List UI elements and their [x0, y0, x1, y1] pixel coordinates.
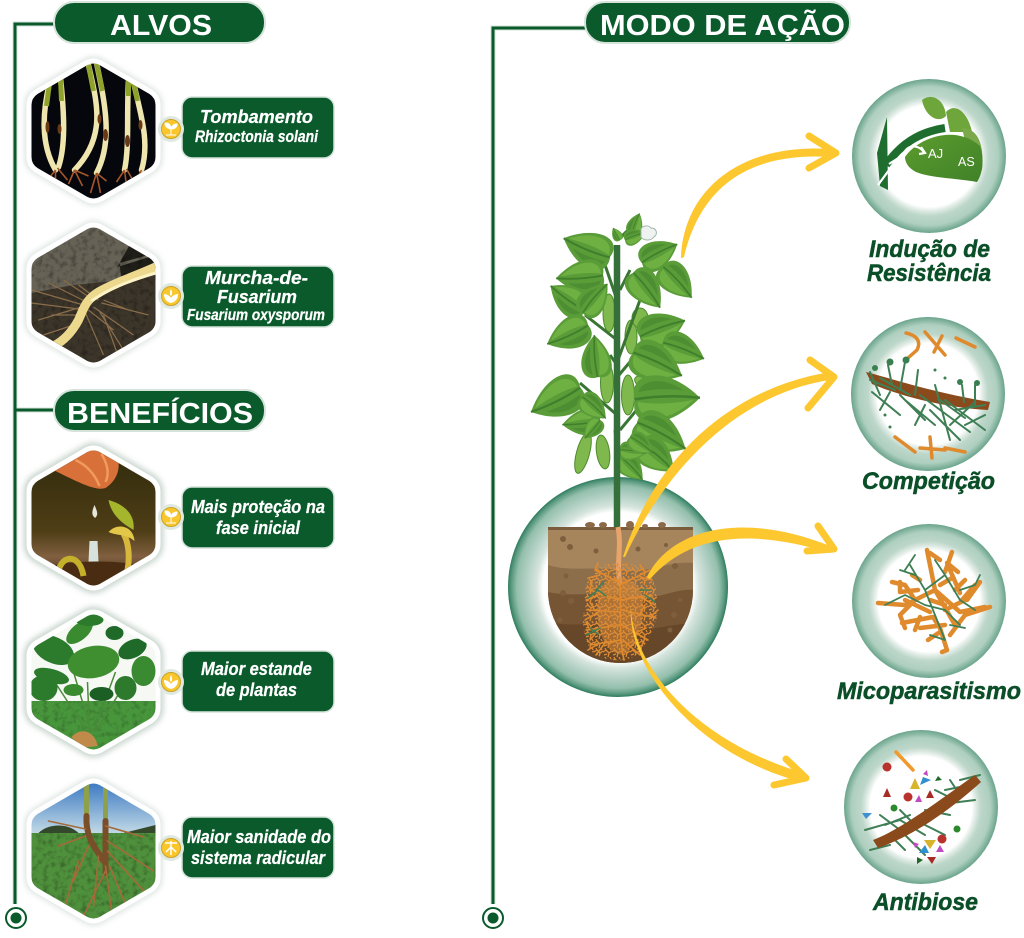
heading: ALVOS: [54, 2, 265, 43]
caption: Micoparasitismo: Micoparasitismo: [837, 678, 1021, 705]
leaves: [522, 211, 710, 488]
label: Mais proteção: fase inicial: [216, 518, 301, 538]
caption: Indução de Resistência: Resistência: [867, 260, 991, 287]
icon: sprout 1: [158, 116, 184, 142]
bubble 2 orange hyphae: [895, 332, 975, 458]
photo hexagon: seed treatment drop: [32, 448, 156, 587]
bubble 1 main leaf: [905, 135, 983, 182]
label: Maior estande: [182, 651, 334, 712]
arrow: to Antibiose: [631, 605, 806, 785]
bubble 3 green hyphae: [885, 555, 980, 640]
plant branches: [580, 228, 645, 440]
label: Tombamento: [182, 97, 334, 158]
heading: ALVOS: ALVOS: [110, 10, 212, 42]
bubble 4 green hyphae: [865, 775, 980, 855]
plant stem: [614, 245, 620, 527]
photo hexagon: tombamento seedlings: [32, 62, 156, 200]
bubble 1 branch: [886, 128, 945, 165]
plant: [522, 211, 710, 585]
icon: root 5: [158, 835, 184, 861]
label: Murcha-de-Fusarium: [182, 266, 334, 327]
heading: MODO DE AÇÃO: MODO DE AÇÃO: [600, 8, 845, 42]
arrow: to Indução de Resistência: [681, 136, 836, 258]
icon: sprout 3: [158, 504, 184, 530]
soil clods: [585, 521, 666, 529]
bubble 1 stem: [877, 117, 888, 190]
bubble: competição: [851, 317, 1005, 471]
label: Mais proteção: Mais proteção na: [191, 497, 325, 517]
soil cross-section: [548, 527, 693, 670]
label: Maior sanidade: [182, 817, 334, 878]
heading: BENEFÍCIOS: BENEFÍCIOS: [67, 396, 253, 430]
icon: leaf 4: [158, 669, 184, 695]
icon: leaf 2: [158, 283, 184, 309]
photo hexagon: healthy root system: [32, 782, 156, 921]
bubble 2 root: [866, 372, 990, 410]
bubble 4 antibiotic molecules: [862, 762, 960, 864]
bubble 1 right leaf: [962, 128, 983, 170]
label: Maior estande: Maior estande: [201, 659, 312, 679]
caption: Antibiose: Antibiose: [872, 889, 978, 916]
heading: MODO DE AÇÃO: [585, 2, 850, 43]
heading: BENEFÍCIOS: [54, 390, 265, 431]
soil bubble: [508, 477, 728, 697]
arrow: to Micoparasitismo: [647, 526, 834, 579]
bubble 1 AS: AS: [958, 155, 975, 169]
bubble 1 upper leaves: [922, 97, 972, 132]
label: Maior sanidade: Maior sanidade do: [187, 827, 331, 847]
label: Murcha-de-Fusarium: Murcha-de-: [205, 268, 308, 288]
label: Tombamento: Rhizoctonia solani: [195, 127, 319, 146]
plant root: [618, 527, 620, 585]
left timeline: [6, 24, 56, 928]
label: Mais proteção: [182, 487, 334, 548]
plant pods: [571, 294, 651, 475]
photo hexagon: murcha-de-fusarium root: [32, 226, 156, 364]
root mass and hyphae: [583, 563, 658, 660]
bubble 4 root: [873, 775, 981, 848]
label: Murcha-de-Fusarium: Fusarium oxysporum: [187, 307, 325, 324]
label: Tombamento: Tombamento: [200, 107, 313, 127]
caption: Competição: Competição: [862, 468, 995, 495]
label: Maior sanidade: sistema radicular: [191, 848, 326, 868]
plant flower: [641, 226, 656, 240]
bubble 1 arrows: [878, 146, 925, 185]
caption: Indução de Resistência: [867, 236, 991, 287]
bubble: micoparasitismo: [852, 524, 1006, 678]
label: Murcha-de-Fusarium: Fusarium: [217, 287, 297, 307]
bubble 3 orange hyphae: [878, 550, 990, 652]
bubble: indução de resistência: [852, 79, 1006, 233]
bubble: antibiose: [844, 730, 998, 884]
arrow: to Competição: [623, 360, 834, 557]
right timeline: [483, 28, 588, 928]
bubble 2 green hyphae: [870, 362, 985, 440]
photo hexagon: healthy plant stand: [28, 613, 156, 753]
bubble 1 AJ: AJ: [928, 146, 943, 161]
bubble 4 orange hypha: [896, 752, 913, 770]
caption: Indução de Resistência: Indução de: [869, 236, 990, 263]
label: Maior estande: de plantas: [216, 680, 297, 700]
